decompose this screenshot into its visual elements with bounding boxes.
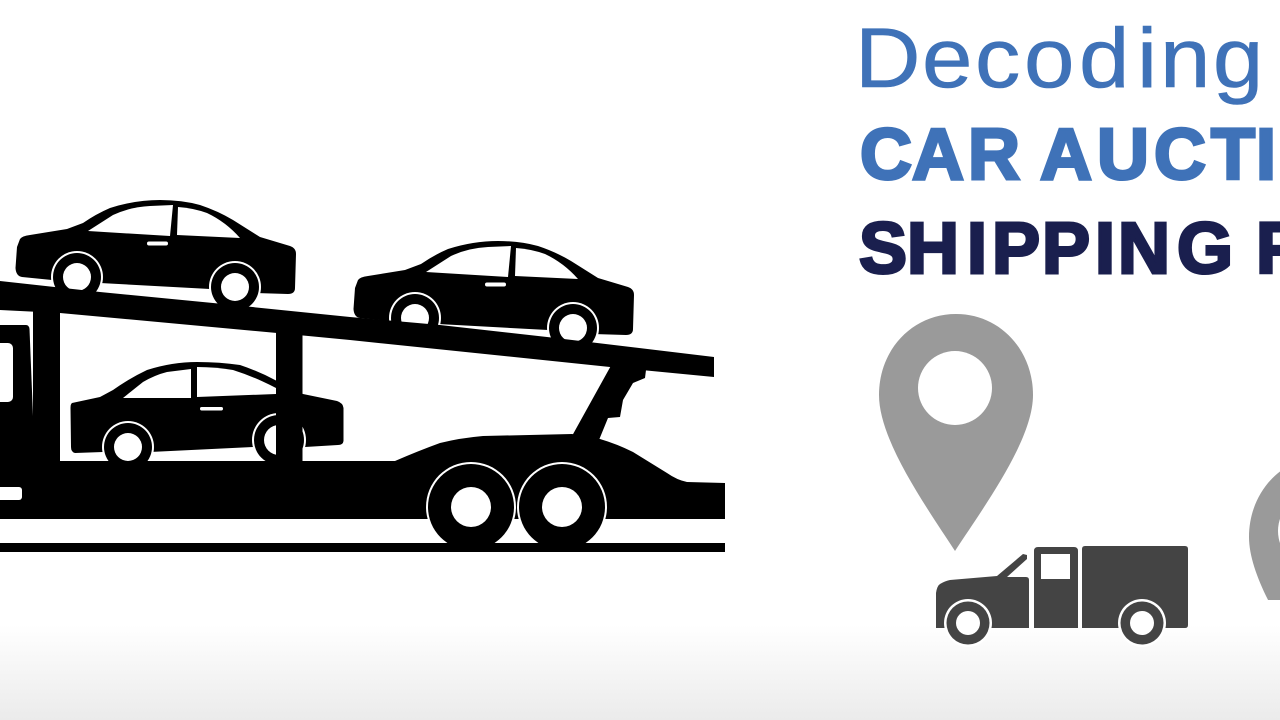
truck front wheel xyxy=(944,599,992,647)
rear light xyxy=(0,487,22,500)
upper ramp deck xyxy=(0,281,714,377)
truck rear wheel xyxy=(1118,599,1166,647)
deck support post: rear xyxy=(276,320,302,470)
wheel: tandem front xyxy=(426,462,516,552)
car: upper deck right xyxy=(354,241,634,354)
truck cargo box xyxy=(1082,546,1188,628)
road line xyxy=(0,543,725,552)
title: Decoding: Decoding xyxy=(855,11,1263,105)
hydraulic arm xyxy=(572,362,646,440)
icon: location pin xyxy=(879,314,1033,551)
trailer chassis xyxy=(0,434,725,519)
truck cab xyxy=(0,325,33,470)
illustration: car carrier truck xyxy=(0,200,725,552)
title: CAR AUCTI: CAR AUCTI xyxy=(860,115,1276,195)
car: lower deck xyxy=(70,362,344,473)
deck support post: front xyxy=(33,300,60,470)
truck hood and windshield xyxy=(936,554,1029,628)
wheel: tandem rear xyxy=(517,462,607,552)
truck door with window xyxy=(1034,547,1078,628)
car: upper deck left xyxy=(16,200,296,313)
icon: second location pin xyxy=(1249,472,1280,600)
icon: delivery truck xyxy=(936,546,1188,647)
